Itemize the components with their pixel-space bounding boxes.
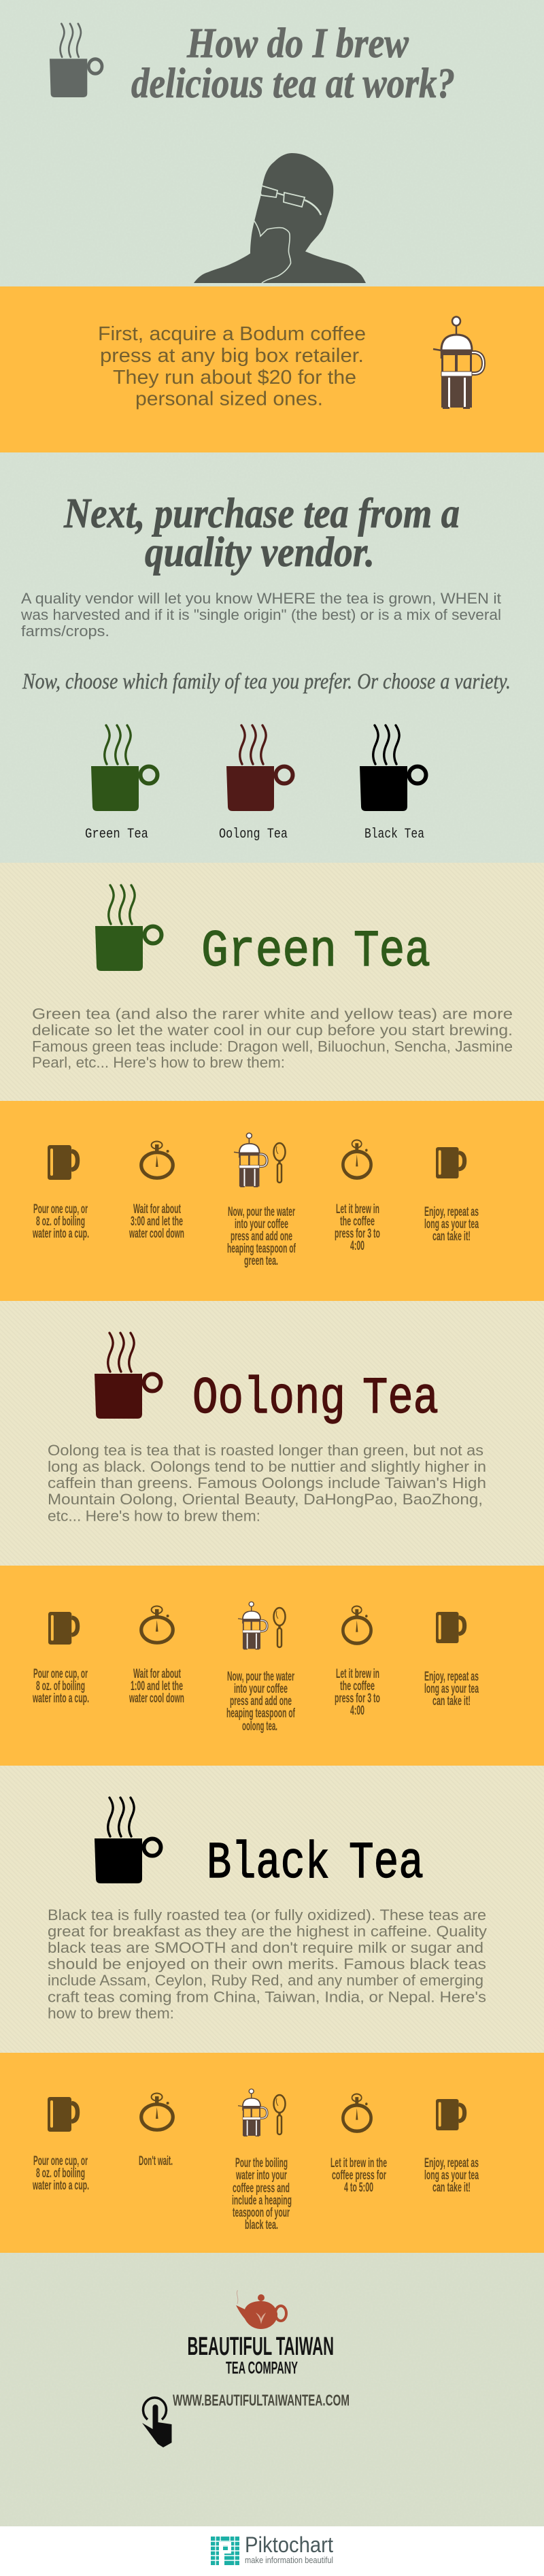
text: acquire a Bodum press: press at any big box retailer. <box>100 345 364 367</box>
icon: black mug <box>95 1798 160 1883</box>
step: pour cup: 8 oz. of boiling <box>36 1215 85 1229</box>
step: press and spoon: Pour the boiling <box>235 2156 288 2170</box>
text: black tea description: black teas are SMOOTH and don't require milk or sugar and <box>48 1939 483 1956</box>
text: website url: WWW.BEAUTIFULTAIWANTEA.COM <box>173 2391 350 2409</box>
step: enjoy: can take it! <box>432 1229 471 1244</box>
text: black tea description: great for breakfast as they are the highest in caffeine. Quality <box>48 1923 487 1940</box>
text: oolong description: Oolong tea is tea that is roasted longer than green, but not as <box>48 1442 483 1459</box>
text: green tea description: Pearl, etc... Here's how to brew them: <box>32 1054 285 1071</box>
step: brew: 4:00 <box>350 1704 364 1718</box>
step: do not wait: Don't wait. <box>139 2154 173 2168</box>
icon: green mug <box>95 885 162 971</box>
step: press and spoon <box>227 1133 296 1268</box>
step: brew: Let it brew in <box>336 1667 379 1681</box>
heading: next purchase tea: quality vendor. <box>145 529 375 576</box>
icon: thinking person silhouette <box>194 153 366 283</box>
step: brew: Let it brew in <box>336 1202 379 1217</box>
text: quality vendor description: A quality vendor will let you know WHERE the tea is grown, WHEN it <box>21 590 501 607</box>
text: acquire a Bodum press: They run about $20 for the <box>113 367 356 389</box>
logo text: piktochart: Piktochart <box>245 2532 333 2557</box>
panel: oolong tea intro <box>0 1301 544 1566</box>
step: press and spoon: black tea. <box>245 2218 278 2232</box>
step: brew: coffee press for <box>332 2168 386 2183</box>
step: press and spoon: into your coffee <box>235 1217 288 1232</box>
step: enjoy: long as your tea <box>424 1682 479 1696</box>
step: wait: Wait for about <box>133 1202 181 1217</box>
step: pour cup: water into a cup. <box>32 1227 89 1241</box>
heading: black tea: Black <box>207 1834 330 1893</box>
step: brew: press for 3 to <box>335 1227 380 1241</box>
text: oolong description: etc... Here's how to brew them: <box>48 1508 260 1524</box>
step: press and spoon: Now, pour the water <box>227 1670 294 1684</box>
step: wait: water cool down <box>129 1227 184 1241</box>
step: enjoy: long as your tea <box>424 2168 479 2183</box>
step: enjoy: Enjoy, repeat as <box>424 2156 479 2170</box>
logo text: company name: TEA COMPANY <box>226 2358 298 2377</box>
icon: french press <box>433 317 483 409</box>
step: pour cup: Pour one cup, or <box>33 1202 88 1217</box>
step: pour cup: water into a cup. <box>32 2179 89 2193</box>
text: oolong description: caffein than greens. Famous Oolongs include Taiwan's High <box>48 1474 486 1491</box>
text: oolong description: long as black. Oolongs tend to be nuttier and slightly higher in <box>48 1458 486 1475</box>
step: press and spoon: heaping teaspoon of <box>226 1706 295 1721</box>
labels: tea families: Black Tea <box>364 827 424 842</box>
heading: green tea <box>201 923 430 981</box>
text: oolong description: Mountain Oolong, Oriental Beauty, DaHongPao, BaoZhong, <box>48 1491 483 1508</box>
step: wait: Wait for about <box>133 1667 181 1681</box>
labels: tea families <box>85 827 424 842</box>
step: enjoy: Enjoy, repeat as <box>424 1205 479 1219</box>
step: wait <box>129 1142 184 1241</box>
step: wait: 1:00 and let the <box>131 1679 183 1694</box>
labels: tea families: Green Tea <box>85 827 148 842</box>
icon: pointing hand <box>142 2398 171 2447</box>
text: black tea description: should be enjoyed on their own merits. Famous black teas <box>48 1955 486 1972</box>
step: brew: press for 3 to <box>335 1691 380 1706</box>
title: delicious tea at work? <box>131 61 455 107</box>
heading: next purchase tea: Next, purchase tea from a <box>63 491 460 537</box>
icon: green tea mug <box>91 725 158 811</box>
text: quality vendor description: farms/crops. <box>21 623 109 640</box>
text: acquire a Bodum press: First, acquire a Bodum coffee <box>98 323 366 345</box>
step: pour cup <box>32 1145 89 1241</box>
step: pour cup: water into a cup. <box>32 1691 89 1706</box>
text: green tea description: delicate so let the water cool in our cup before you start brewing. <box>32 1022 513 1038</box>
heading: oolong tea: Oolong <box>192 1370 345 1428</box>
step: press and spoon <box>226 1602 295 1734</box>
text: black tea description: Black tea is fully roasted tea (or fully oxidized). These teas are <box>48 1906 486 1923</box>
icon: piktochart mark <box>211 2537 239 2565</box>
step: press and spoon: include a heaping <box>232 2194 292 2208</box>
text: quality vendor description: was harvested and if it is "single origin" (the best) or is a mix of several <box>20 606 501 623</box>
step: press and spoon: coffee press and <box>233 2181 290 2196</box>
step: press and spoon: heaping teaspoon of <box>227 1242 296 1256</box>
step: wait: 3:00 and let the <box>131 1215 183 1229</box>
step: pour cup: Pour one cup, or <box>33 2154 88 2168</box>
step: brew: the coffee <box>340 1215 375 1229</box>
panel: green tea intro <box>0 863 544 1101</box>
step: pour cup <box>32 1612 89 1706</box>
step: press and spoon: press and add one <box>230 1694 292 1708</box>
panel: black tea steps <box>0 2053 544 2253</box>
icon: steaming grey mug <box>50 24 102 97</box>
icon: black tea mug <box>360 725 426 811</box>
step: wait: water cool down <box>129 1691 184 1706</box>
heading: green tea: Green <box>201 923 337 981</box>
step: press and spoon: teaspoon of your <box>233 2206 290 2220</box>
title <box>131 20 455 107</box>
icon: oolong tea mug <box>226 725 292 811</box>
step: do not wait <box>139 2093 173 2168</box>
step: enjoy <box>424 1612 479 1708</box>
heading: oolong tea: Tea <box>362 1370 439 1428</box>
step: press and spoon <box>232 2089 292 2232</box>
tagline: make information beautiful <box>245 2555 333 2565</box>
step: press and spoon: Now, pour the water <box>228 1205 295 1219</box>
step: enjoy: can take it! <box>432 2181 471 2195</box>
panel: intro header <box>0 0 544 286</box>
panel: company footer <box>0 2253 544 2526</box>
step: wait <box>129 1606 184 1706</box>
heading: green tea: Tea <box>354 923 430 981</box>
step: enjoy: can take it! <box>432 1694 471 1708</box>
text: green tea description: Famous green teas include: Dragon well, Biluochun, Sencha, Jasmine <box>32 1038 513 1055</box>
step: brew: 4 to 5:00 <box>344 2181 373 2195</box>
step: pour cup: 8 oz. of boiling <box>36 1679 85 1694</box>
text: black tea description: craft teas coming from China, Taiwan, India, or Nepal. Here's <box>48 1988 486 2006</box>
step: brew: 4:00 <box>350 1239 364 1253</box>
step: brew: Let it brew in the <box>330 2156 387 2170</box>
panel: purchase tea <box>0 452 544 863</box>
text: quality vendor description <box>20 590 501 640</box>
panel: green tea steps <box>0 1101 544 1301</box>
step: press and spoon: oolong tea. <box>242 1719 277 1734</box>
heading: next purchase tea <box>63 491 460 576</box>
text: acquire a Bodum press <box>98 323 366 410</box>
step: pour cup: Pour one cup, or <box>33 1667 88 1681</box>
text: black tea description: how to brew them: <box>48 2004 174 2022</box>
text: black tea description <box>48 1906 487 2022</box>
step: enjoy: Enjoy, repeat as <box>424 1670 479 1684</box>
panel: acquire coffee press <box>0 286 544 452</box>
text: oolong description <box>48 1442 486 1524</box>
panel: oolong tea steps <box>0 1566 544 1766</box>
text: green tea description: Green tea (and also the rarer white and yellow teas) are more <box>32 1006 513 1022</box>
step: press and spoon: green tea. <box>244 1254 278 1268</box>
heading: black tea: Tea <box>349 1834 424 1893</box>
text: black tea description: include Assam, Ceylon, Ruby Red, and any number of emerging <box>48 1972 483 1989</box>
step: enjoy <box>424 2099 479 2195</box>
step: brew: the coffee <box>340 1679 375 1694</box>
step: enjoy <box>424 1147 479 1244</box>
step: press and spoon: water into your <box>235 2168 287 2183</box>
step: enjoy: long as your tea <box>424 1217 479 1232</box>
step: brew <box>335 1140 380 1253</box>
logo text: company name: BEAUTIFUL TAIWAN <box>188 2332 334 2361</box>
panel: black tea intro <box>0 1766 544 2053</box>
step: brew <box>335 1606 380 1718</box>
logo text: company name <box>188 2332 334 2377</box>
step: pour cup: 8 oz. of boiling <box>36 2166 85 2181</box>
text: acquire a Bodum press: personal sized ones. <box>135 388 323 410</box>
icon: teapot logo <box>236 2290 286 2329</box>
panel: piktochart credit <box>0 2526 544 2576</box>
step: press and spoon: into your coffee <box>234 1682 288 1696</box>
title: How do I brew <box>186 20 409 67</box>
step: pour cup <box>32 2097 89 2193</box>
icon: oolong mug <box>95 1333 160 1419</box>
step: brew <box>330 2094 387 2195</box>
labels: tea families: Oolong Tea <box>219 827 288 842</box>
step: press and spoon: press and add one <box>231 1229 292 1244</box>
text: green tea description <box>32 1006 513 1071</box>
